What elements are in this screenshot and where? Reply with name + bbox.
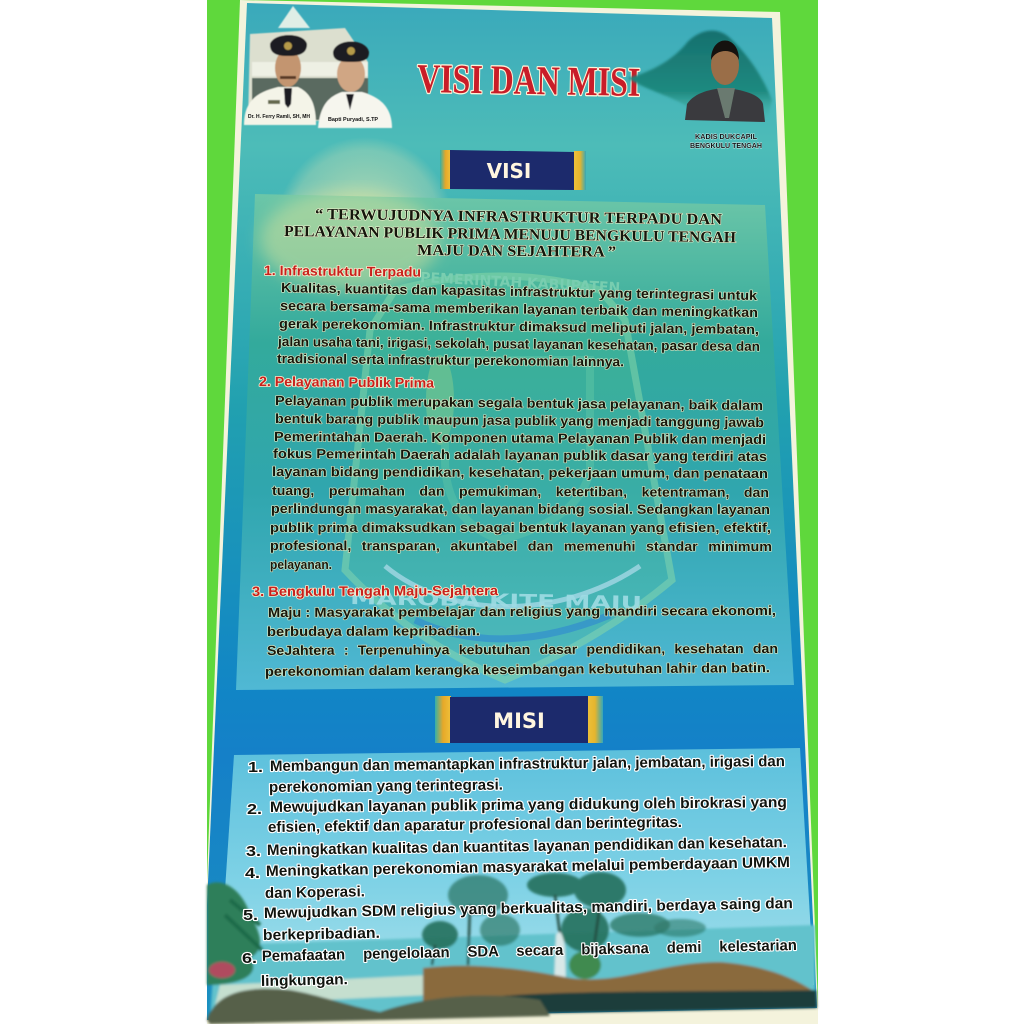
- mission 5: 5.: [243, 907, 258, 924]
- MISI banner: MISI: [493, 709, 545, 733]
- panel: visi: [236, 190, 794, 690]
- item 1 text: jalan usaha tani, irigasi, sekolah, pusat layanan kesehatan, pasar desa dan: [277, 334, 760, 354]
- head of department caption line 2: BENGKULU TENGAH: [690, 141, 762, 150]
- mission 2: 2.: [247, 801, 262, 818]
- item 1 text: gerak perekonomian. Infrastruktur dimaksud meliputi jalan, jembatan,: [279, 316, 759, 337]
- MISI banner: [435, 696, 603, 743]
- mission 1: 1.: [248, 759, 263, 776]
- crest motto: MAROBA KITE MAJU: [350, 588, 642, 614]
- mission 5: berkepribadian.: [263, 925, 380, 944]
- item 2 text: fokus Pemerintah Daerah adalah layanan publik dasar yang terdiri atas: [273, 446, 767, 464]
- mission 6: [242, 937, 797, 990]
- mission 1: [248, 753, 785, 796]
- header group: officials photo: [244, 6, 392, 128]
- building behind officials: [248, 6, 368, 122]
- tree trunks: [432, 895, 600, 975]
- head of department caption: KADIS DUKCAPIL: [695, 132, 757, 141]
- item 3 text: [265, 603, 778, 679]
- mission 2: Mewujudkan layanan publik prima yang didukung oleh birokrasi yang: [270, 794, 787, 816]
- vision statement: [284, 206, 736, 261]
- item 2 text: layanan bidang pendidikan, kesehatan, pekerjaan umum, dan penataan: [272, 464, 768, 481]
- item 2 text: pelayanan.: [270, 557, 332, 572]
- jacket: [685, 88, 765, 122]
- beach scene: [207, 872, 817, 1024]
- mission 4: [245, 854, 790, 902]
- item 2 text: Pemerintahan Daerah. Komponen utama Pelayanan Publik dan menjadi: [274, 429, 766, 447]
- item 1 text: tradisional serta infrastruktur perekonomian lainnya.: [277, 351, 624, 369]
- item 2 text: Pelayanan publik merupakan segala bentuk jasa pelayanan, baik dalam: [275, 393, 763, 413]
- green bushes: [569, 951, 601, 979]
- sand strip: [215, 975, 430, 1005]
- VISI banner: VISI: [487, 159, 531, 183]
- mission 1: perekonomian yang terintegrasi.: [269, 777, 503, 796]
- vision statement: MAJU DAN SEJAHTERA ”: [417, 242, 616, 261]
- head: [711, 45, 739, 85]
- vision statement: “ TERWUJUDNYA INFRASTRUKTUR TERPADU DAN: [315, 206, 722, 228]
- mission 6: 6.: [242, 950, 257, 967]
- left foliage: [207, 882, 260, 985]
- VISI banner: [440, 150, 586, 190]
- red flowers: [209, 962, 235, 978]
- visi panel background: [236, 194, 794, 690]
- rock island: [423, 962, 816, 1012]
- mission 6: lingkungan.: [261, 971, 348, 990]
- item 2 text: publik prima dimaksudkan sebagai bentuk layanan yang efisien, efektif,: [270, 520, 771, 535]
- mission 4: Meningkatkan perekonomian masyarakat melalui pemberdayaan UMKM: [266, 854, 790, 880]
- poster background: [207, 3, 817, 1020]
- item 2 text: [270, 393, 772, 572]
- regent portrait: [244, 35, 316, 125]
- item 3 text: berbudaya dalam kepribadian.: [267, 623, 480, 639]
- vice regent portrait: [318, 42, 392, 128]
- item 1 heading: 1. Infrastruktur Terpadu: [264, 263, 421, 280]
- main title: VISI DAN MISI: [417, 55, 641, 105]
- item 3 text: Maju : Masyarakat pembelajar dan religius yang mandiri secara ekonomi,: [268, 603, 776, 620]
- mission 5: [243, 895, 793, 944]
- island trees: [422, 872, 706, 952]
- lens flare glow: [277, 137, 453, 313]
- vision statement: PELAYANAN PUBLIK PRIMA MENUJU BENGKULU TENGAH: [284, 223, 736, 246]
- regent caption: Dr. H. Ferry Ramli, SH, MH: [248, 114, 310, 120]
- misi panel background: [218, 748, 814, 995]
- mission 2: efisien, efektif dan aparatur profesional dan berintegritas.: [268, 814, 682, 836]
- mission 3: Meningkatkan kualitas dan kuantitas layanan pendidikan dan kesehatan.: [267, 834, 787, 859]
- item 2 text: bentuk barang publik maupun jasa publik yang menjadi tanggung jawab: [275, 411, 764, 430]
- sea: [210, 925, 815, 1020]
- mission 4: 4.: [245, 865, 260, 882]
- watermark: regency crest: [345, 270, 672, 680]
- item 3 text: perekonomian dalam kerangka keseimbangan kebutuhan lahir dan batin.: [265, 660, 770, 679]
- item 1 text: Kualitas, kuantitas dan kapasitas infrastruktur yang terintegrasi untuk: [281, 280, 758, 303]
- mission 2: [247, 794, 787, 836]
- glow over panel: [260, 190, 440, 290]
- item 2 text: perlindungan masyarakat, dan layanan bidang sosial. Sedangkan layanan: [271, 501, 770, 517]
- green wall: [207, 0, 818, 1024]
- mission 4: dan Koperasi.: [265, 883, 365, 902]
- panel: misi: [207, 748, 817, 1024]
- banner cream border: [207, 0, 818, 1024]
- foreground rocks: [207, 989, 550, 1024]
- white statue: [554, 932, 566, 985]
- mission 1: Membangun dan memantapkan infrastruktur jalan, jembatan, irigasi dan: [270, 753, 785, 775]
- mission 6: Pemafaatan pengelolaan SDA secara bijaksana demi kelestarian: [262, 937, 797, 965]
- item 1 text: [277, 280, 760, 369]
- vice regent caption: Bapti Puryadi, S.TP: [328, 117, 378, 123]
- shirt and tie: [717, 88, 735, 118]
- mission 5: Mewujudkan SDM religius yang berkualitas, mandiri, berdaya saing dan: [264, 895, 793, 922]
- mission 3: 3.: [246, 843, 261, 860]
- item 3 text: SeJahtera : Terpenuhinya kebutuhan dasar pendidikan, kesehatan dan: [267, 641, 778, 658]
- crest top text: PEMERINTAH KABUPATEN: [420, 270, 621, 296]
- item 2 text: tuang, perumahan dan pemukiman, ketertiban, ketentraman, dan: [272, 483, 769, 500]
- item 3 heading: 3. Bengkulu Tengah Maju-Sejahtera: [252, 583, 498, 599]
- item 2 heading: 2. Pelayanan Publik Prima: [259, 374, 435, 391]
- item 1 text: secara bersama-sama memberikan layanan terbaik dan meningkatkan: [280, 298, 758, 320]
- mountain and head of department portrait: [628, 31, 772, 122]
- mountain: [628, 31, 772, 118]
- item 2 text: profesional, transparan, akuntabel dan memenuhi standar minimum: [270, 538, 772, 554]
